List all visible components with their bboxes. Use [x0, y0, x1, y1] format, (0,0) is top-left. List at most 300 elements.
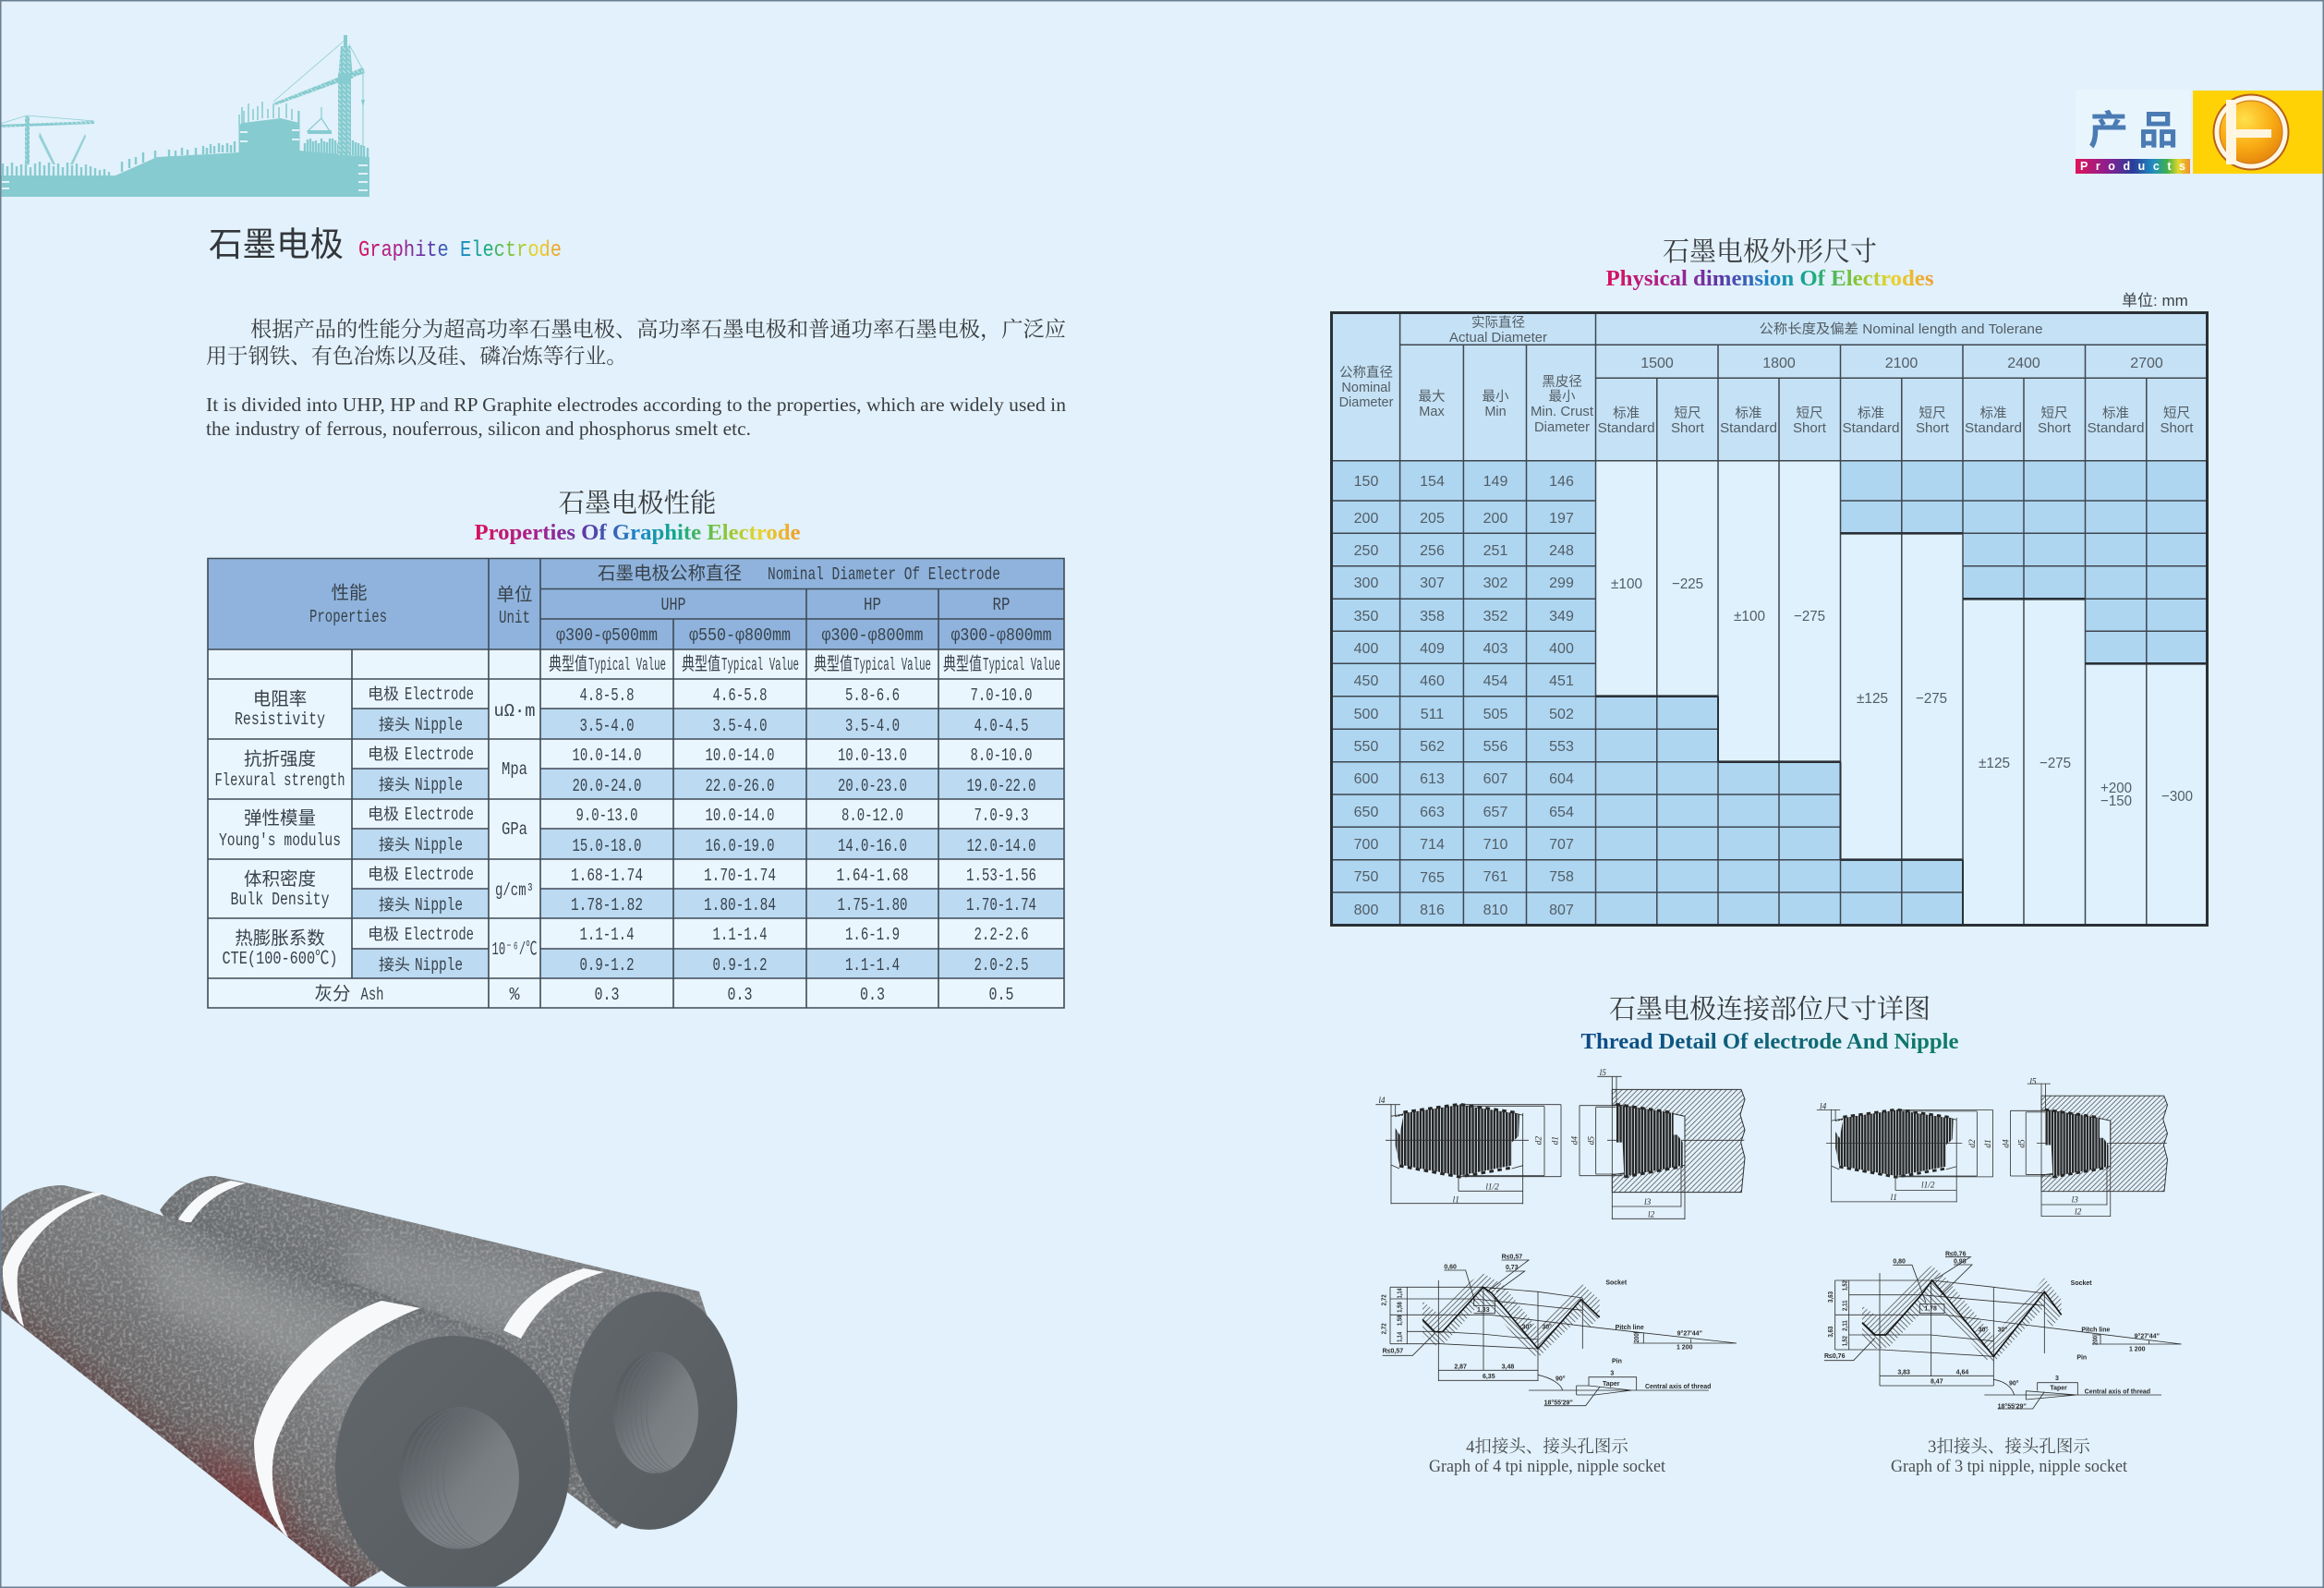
diagram: 3 tpi thread profile: 30° [1998, 1327, 2007, 1334]
diagram: 3 tpi thread profile: Pitch line [2081, 1327, 2110, 1334]
diagram: 3 tpi thread profile: 1,52 [1843, 1280, 1849, 1291]
diagram: 3 tpi thread profile: Taper [2050, 1385, 2067, 1391]
diameter rows: 550 [1354, 739, 1378, 755]
values: resistivity, strength, modulus, density, CTE, ash: 1.1-1.4 [580, 925, 634, 945]
diagram: 3 tpi nipple and socket outline: d5 [2017, 1139, 2027, 1148]
intro text: 用于钢铁、有色冶炼以及硅、磷冶炼等行业。 [206, 345, 627, 368]
diagram: 3 tpi thread profile: 1 200 [2129, 1347, 2146, 1353]
values: resistivity, strength, modulus, density, CTE, ash: 14.0-16.0 [838, 836, 907, 856]
column headers: RP [992, 595, 1011, 615]
diagram: 4 tpi thread profile: Taper [1603, 1381, 1620, 1388]
diameter rows: 250 [1354, 543, 1378, 559]
diagram: 3 tpi thread profile: 3 [2055, 1376, 2059, 1382]
property names: Young's modulus [219, 830, 341, 851]
typical value row: 典型值 [682, 654, 720, 674]
diameter rows: 765 [1420, 870, 1445, 886]
column headers: Nominal Diameter Of Electrode [768, 564, 1000, 585]
caption: 4 tpi graph: 4扣接头、接头孔图示 [1466, 1437, 1628, 1457]
diagram: 4 tpi nipple and socket outline: l3 [1644, 1198, 1652, 1207]
property names: 弹性模量 [244, 808, 316, 829]
diagram: 4 tpi thread profile: 1 200 [1676, 1345, 1693, 1352]
diagram: 4 tpi thread profile: R≤0,57 [1502, 1255, 1522, 1261]
table: graphite electrode properties [208, 558, 1064, 1008]
diagram: 4 tpi thread profile: 2,72 [1382, 1323, 1388, 1334]
header labels: 最大 [1419, 389, 1445, 405]
diameter rows: 400 [1354, 641, 1378, 657]
header labels: 标准 [1980, 406, 2006, 421]
values: resistivity, strength, modulus, density, CTE, ash: 7.0-10.0 [970, 685, 1033, 706]
diagram: 3 tpi thread profile: 9°27′44″ [2135, 1332, 2161, 1339]
heading: thread detail: 石墨电极连接部位尺寸详图 [1609, 994, 1931, 1024]
diameter rows: 714 [1420, 837, 1445, 853]
property names: Flexural strength [214, 770, 345, 791]
diagram: 4 tpi nipple and socket outline: l1 [1453, 1195, 1459, 1205]
electrode and nipple labels: 接头 [379, 896, 410, 914]
diameter rows: 349 [1549, 609, 1574, 624]
diameter rows: 460 [1420, 673, 1445, 689]
header labels: Short [1793, 421, 1826, 436]
diagram: 3 tpi nipple and socket outline: l5 [2029, 1077, 2037, 1086]
diagram: 4 tpi thread profile: R≤0,57 [1383, 1349, 1403, 1355]
tolerance values: ±125 [1979, 756, 2010, 771]
diagram: 3 tpi nipple and socket outline: d2 [1968, 1139, 1978, 1148]
diameter rows: 511 [1421, 707, 1444, 722]
diagram: 4 tpi thread profile: 90° [1555, 1376, 1566, 1383]
column headers: 性能 [331, 583, 368, 603]
header labels: 2100 [1885, 356, 1918, 371]
diagram: 3 tpi nipple and socket outline: l1 [1891, 1194, 1897, 1203]
column headers: 石墨电极公称直径 [598, 564, 742, 584]
table: physical dimensions of electrodes [1331, 312, 2208, 926]
diagram: 4 tpi thread profile: 6,35 [1483, 1374, 1495, 1380]
values: resistivity, strength, modulus, density, CTE, ash: 5.8-6.6 [845, 685, 900, 706]
diagram: 3 tpi thread profile: 18°55′29″ [1998, 1402, 2027, 1410]
units column: uΩ·m [493, 701, 536, 721]
values: resistivity, strength, modulus, density, CTE, ash: 12.0-14.0 [966, 836, 1036, 856]
diameter rows: 700 [1354, 837, 1378, 853]
header labels: 2400 [2007, 356, 2040, 371]
diameter rows: 654 [1549, 805, 1574, 820]
diagram: 4 tpi thread profile: 1,33 [1477, 1307, 1490, 1314]
values: resistivity, strength, modulus, density, CTE, ash: 3.5-4.0 [580, 716, 634, 736]
diameter rows: 200 [1483, 511, 1507, 527]
tolerance values: ±100 [1734, 609, 1765, 624]
tolerance values [1611, 576, 2193, 809]
diameter rows: 256 [1420, 543, 1445, 559]
diagram: 4 tpi nipple and socket outline: l1/2 [1485, 1182, 1499, 1192]
values: resistivity, strength, modulus, density, CTE, ash: 9.0-13.0 [576, 806, 637, 826]
tolerance values: ±100 [1611, 576, 1642, 592]
units column: 10⁻⁶/℃ [491, 939, 538, 960]
diagram: 3 tpi thread profile: 90° [2009, 1379, 2019, 1387]
header labels [1339, 315, 2193, 436]
diagram: 4 tpi nipple and socket outline: d1 [1552, 1136, 1561, 1145]
values: resistivity, strength, modulus, density, CTE, ash: 10.0-13.0 [838, 746, 907, 766]
header labels: 短尺 [2163, 406, 2190, 421]
diameter rows: 300 [1354, 576, 1378, 591]
typical value row [549, 654, 1060, 675]
electrode and nipple labels: 电极 [368, 746, 399, 763]
logo subtitle: Products [2080, 160, 2185, 173]
diameter rows: 403 [1483, 641, 1507, 657]
values: resistivity, strength, modulus, density, CTE, ash: 2.0-2.5 [974, 955, 1029, 976]
values: resistivity, strength, modulus, density, CTE, ash: 0.3 [860, 985, 885, 1005]
column headers [309, 564, 1051, 646]
values: resistivity, strength, modulus, density, CTE, ash: 16.0-19.0 [706, 836, 774, 856]
electrode and nipple labels: 接头 [379, 716, 410, 733]
electrode and nipple labels: 电极 [368, 926, 399, 943]
electrode and nipple labels: 接头 [379, 956, 410, 974]
diameter rows: 613 [1420, 771, 1445, 787]
header labels: Diameter [1534, 420, 1590, 435]
header labels: Min [1484, 405, 1507, 419]
diagram: 4 tpi nipple and socket outline: l5 [1600, 1069, 1606, 1078]
values: resistivity, strength, modulus, density, CTE, ash: 3.5-4.0 [713, 716, 767, 736]
diagram: 3 tpi thread profile: 200 [2093, 1336, 2100, 1345]
units column: % [510, 985, 520, 1005]
tolerance values: +200 [2100, 781, 2132, 796]
column headers: Properties [309, 607, 387, 627]
diameter rows: 307 [1420, 576, 1445, 591]
values: resistivity, strength, modulus, density, CTE, ash: 1.1-1.4 [845, 955, 900, 976]
header labels: Nominal [1341, 381, 1391, 395]
diameter rows: 400 [1549, 641, 1574, 657]
values: resistivity, strength, modulus, density, CTE, ash [314, 685, 1036, 1005]
header labels: 短尺 [1674, 406, 1701, 421]
diagram: 3 tpi thread profile: 1,52 [1843, 1336, 1849, 1346]
values: resistivity, strength, modulus, density, CTE, ash: 1.64-1.68 [837, 866, 909, 886]
diagram: 4 tpi thread profile: 2,72 [1382, 1294, 1388, 1305]
values: resistivity, strength, modulus, density, CTE, ash: 3.5-4.0 [845, 716, 900, 736]
diagram: 4 tpi thread profile: 18°55′29″ [1544, 1400, 1573, 1407]
electrode and nipple labels: 电极 [368, 806, 399, 823]
values: resistivity, strength, modulus, density, CTE, ash: 1.78-1.82 [571, 895, 643, 915]
heading: thread detail [1581, 994, 1959, 1054]
electrode and nipple labels: Electrode [405, 925, 474, 945]
header labels: 公称直径 [1339, 365, 1393, 381]
header labels: Standard [2088, 421, 2145, 436]
values: resistivity, strength, modulus, density, CTE, ash: 1.70-1.74 [966, 895, 1036, 915]
diagram: 4 tpi thread profile: 1,58 [1397, 1302, 1403, 1313]
typical value row: Typical Value [721, 655, 799, 675]
diameter rows: 502 [1549, 707, 1574, 722]
diameter rows: 600 [1354, 771, 1378, 787]
diagram: 3 tpi nipple and socket outline [1817, 1077, 2168, 1218]
diagram: 4 tpi thread profile: Pitch line [1616, 1325, 1644, 1331]
values: resistivity, strength, modulus, density, CTE, ash: 0.3 [728, 985, 752, 1005]
values: resistivity, strength, modulus, density, CTE, ash: 20.0-23.0 [838, 776, 907, 796]
title: 石墨电极 [209, 225, 344, 263]
diagram: 4 tpi thread profile: Pin [1612, 1358, 1622, 1364]
diagram: 4 tpi thread profile [1382, 1255, 1737, 1407]
icon: small tower crane [0, 115, 94, 164]
diagram: 3 tpi thread profile: 3,63 [1828, 1327, 1834, 1338]
diagram: 3 tpi thread profile: 4,64 [1956, 1369, 1968, 1376]
header labels: 1500 [1640, 356, 1674, 371]
diameter rows: 505 [1483, 707, 1507, 722]
typical value row: Typical Value [588, 655, 666, 675]
intro text: the industry of ferrous, nouferrous, silicon and phosphorus smelt etc. [206, 418, 751, 440]
diagram: 4 tpi thread profile: 30° [1522, 1324, 1531, 1331]
diagram: 3 tpi nipple and socket outline: d1 [1984, 1139, 1993, 1148]
title [209, 225, 562, 263]
units column: Mpa [502, 759, 527, 780]
column headers: Unit [499, 608, 530, 628]
diameter rows: 350 [1354, 609, 1378, 624]
column headers: HP [864, 595, 881, 615]
heading: physical dimension: 石墨电极外形尺寸 [1663, 236, 1877, 267]
values: resistivity, strength, modulus, density, CTE, ash: Ash [360, 985, 384, 1005]
diagram: 3 tpi thread profile [1824, 1251, 2182, 1410]
intro text: It is divided into UHP, HP and RP Graphite electrodes according to the properties, which are widely used in [206, 394, 1067, 416]
diagram: 3 tpi nipple and socket outline: l3 [2072, 1195, 2078, 1205]
caption: 3 tpi graph: Graph of 3 tpi nipple, nipple socket [1891, 1457, 2128, 1476]
electrode and nipple labels: Electrode [405, 685, 474, 705]
values: resistivity, strength, modulus, density, CTE, ash: 0.3 [595, 985, 619, 1005]
diagram: 3 tpi thread profile: 0,80 [1893, 1258, 1906, 1265]
shaded and open cells [1331, 461, 2207, 925]
diagram: 3 tpi thread profile: 2,11 [1843, 1320, 1849, 1331]
values: resistivity, strength, modulus, density, CTE, ash: 0.5 [988, 985, 1014, 1005]
diameter rows: 604 [1549, 771, 1574, 787]
diameter rows: 553 [1549, 739, 1574, 755]
diagram: 3 tpi thread profile: 3,83 [1897, 1369, 1910, 1376]
typical value row: Typical Value [853, 655, 931, 675]
diagram: 3 tpi thread profile: 3,63 [1828, 1291, 1834, 1303]
diameter rows: 200 [1354, 511, 1378, 527]
caption: 3 tpi graph: 3扣接头、接头孔图示 [1928, 1437, 2090, 1457]
icon: tall tower crane [272, 35, 365, 155]
header labels: Max [1419, 405, 1445, 419]
diagram: 4 tpi thread profile: 1,14 [1397, 1288, 1403, 1298]
caption: 4 tpi graph: Graph of 4 tpi nipple, nipple socket [1429, 1457, 1666, 1476]
diagram: 3 tpi thread profile: Pin [2076, 1355, 2087, 1362]
values: resistivity, strength, modulus, density, CTE, ash: 1.53-1.56 [966, 866, 1036, 886]
electrode and nipple labels: Electrode [405, 745, 474, 765]
column headers: φ300-φ800mm [951, 625, 1051, 646]
header labels: 短尺 [1919, 406, 1945, 421]
column headers: φ300-φ800mm [822, 625, 924, 646]
diagram: 4 tpi thread profile: 1,14 [1397, 1332, 1403, 1342]
diagram: 4 tpi nipple and socket outline: d5 [1587, 1136, 1596, 1145]
diagram: 3 tpi thread profile: Socket [2071, 1280, 2092, 1287]
header labels: Short [1916, 421, 1949, 436]
header labels: 公称长度及偏差 Nominal length and Tolerane [1759, 321, 2043, 337]
diagram: 4 tpi thread profile: 3 [1610, 1371, 1614, 1377]
values: resistivity, strength, modulus, density, CTE, ash: 7.0-9.3 [974, 806, 1029, 826]
diagram: 3 tpi nipple and socket outline: d4 [2003, 1139, 2012, 1148]
values: resistivity, strength, modulus, density, CTE, ash: 22.0-26.0 [706, 776, 774, 796]
heading: physical dimension: Physical dimension Of Electrodes [1605, 267, 1934, 291]
tolerance values: −275 [1794, 609, 1825, 624]
diagram: 4 tpi nipple and socket outline: l2 [1648, 1210, 1655, 1219]
values: resistivity, strength, modulus, density, CTE, ash: 4.8-5.8 [580, 685, 634, 706]
front end face with threaded socket [329, 1330, 576, 1588]
property names: 电阻率 [253, 689, 307, 709]
values: resistivity, strength, modulus, density, CTE, ash: 1.75-1.80 [837, 895, 907, 915]
header labels: Actual Diameter [1449, 331, 1547, 345]
column headers: φ550-φ800mm [689, 625, 791, 646]
diameter rows: 358 [1420, 609, 1445, 624]
diameter rows: 454 [1483, 673, 1507, 689]
property names: 抗折强度 [244, 749, 316, 770]
diagram: 4 tpi thread profile: Socket [1605, 1279, 1628, 1286]
electrode and nipple labels [368, 685, 474, 976]
property names: Bulk Density [231, 890, 330, 910]
unit note: 单位: mm [2122, 292, 2188, 309]
units column: g/cm³ [495, 880, 534, 901]
diameter rows: 302 [1483, 576, 1507, 591]
diameter rows: 707 [1549, 837, 1574, 853]
values: resistivity, strength, modulus, density, CTE, ash: 0.9-1.2 [580, 955, 634, 976]
caption: 3 tpi graph [1891, 1437, 2128, 1476]
header labels: Short [1671, 421, 1704, 436]
diagram: 4 tpi nipple and socket outline: d4 [1570, 1136, 1580, 1145]
values: resistivity, strength, modulus, density, CTE, ash: 10.0-14.0 [573, 746, 641, 766]
values: resistivity, strength, modulus, density, CTE, ash: 8.0-12.0 [841, 806, 903, 826]
diameter rows: 251 [1483, 543, 1507, 559]
values: resistivity, strength, modulus, density, CTE, ash: 1.68-1.74 [571, 866, 643, 886]
diameter rows: 807 [1549, 903, 1574, 918]
header labels: Standard [1965, 421, 2022, 436]
units column [491, 701, 538, 1005]
diagram: 4 tpi thread profile: 30° [1542, 1324, 1552, 1331]
electrode and nipple labels: 电极 [368, 685, 399, 703]
typical value row: 典型值 [814, 654, 853, 674]
diagram: 4 tpi nipple and socket outline: d2 [1535, 1136, 1544, 1145]
header labels: Standard [1598, 421, 1655, 436]
values: resistivity, strength, modulus, density, CTE, ash: 1.70-1.74 [704, 866, 776, 886]
header labels: 标准 [1858, 406, 1884, 421]
property names [214, 689, 345, 969]
electrode and nipple labels: 接头 [379, 776, 410, 794]
heading: thread detail: Thread Detail Of electrode And Nipple [1581, 1030, 1959, 1054]
diameter rows: 607 [1483, 771, 1507, 787]
electrode and nipple labels: Electrode [405, 865, 474, 885]
header labels: Diameter [1339, 395, 1394, 410]
header labels: 黑皮径 [1542, 374, 1582, 390]
electrode and nipple labels: 电极 [368, 866, 399, 883]
values: resistivity, strength, modulus, density, CTE, ash: 20.0-24.0 [573, 776, 641, 796]
electrode and nipple labels: Nipple [415, 715, 463, 735]
illustration: construction skyline with cranes [0, 35, 369, 197]
diameter rows: 562 [1420, 739, 1445, 755]
diagram: 3 tpi nipple and socket outline: l4 [1820, 1103, 1827, 1112]
values: resistivity, strength, modulus, density, CTE, ash: 8.0-10.0 [970, 746, 1033, 766]
diagram: 4 tpi thread profile: 0,60 [1444, 1264, 1457, 1270]
diagram: 3 tpi nipple and socket outline: l2 [2075, 1208, 2082, 1218]
tolerance values: −275 [2040, 756, 2071, 771]
header labels: 1800 [1762, 356, 1796, 371]
header labels: 标准 [1613, 406, 1640, 421]
values: resistivity, strength, modulus, density, CTE, ash: 19.0-22.0 [966, 776, 1036, 796]
logo title 产品: 产品 [2088, 109, 2188, 153]
column headers: UHP [661, 595, 685, 615]
header labels: Min. Crust [1531, 405, 1593, 419]
property names: 热膨胀系数 [235, 928, 325, 949]
diagram: 4 tpi thread profile: 3,48 [1502, 1364, 1514, 1370]
diameter rows: 663 [1420, 805, 1445, 820]
header labels: 标准 [1735, 406, 1762, 421]
diagram: 3 tpi thread profile: 1,78 [1924, 1306, 1937, 1313]
property names: 体积密度 [244, 869, 316, 890]
values: resistivity, strength, modulus, density, CTE, ash: 灰分 [314, 984, 351, 1004]
header labels: 短尺 [1796, 406, 1823, 421]
values: resistivity, strength, modulus, density, CTE, ash: 1.1-1.4 [713, 925, 767, 945]
diagram: 4 tpi thread profile: 2,87 [1454, 1364, 1467, 1370]
diameter rows: 205 [1420, 511, 1445, 527]
heading: physical dimension [1605, 236, 1934, 291]
header labels: Standard [1720, 421, 1777, 436]
caption: 4 tpi graph [1429, 1437, 1666, 1476]
diagram: 3 tpi thread profile: 8,47 [1931, 1378, 1943, 1385]
diameter rows: 154 [1420, 474, 1445, 490]
diagram: 3 tpi thread profile: 30° [1979, 1327, 1988, 1334]
diagram: 4 tpi nipple and socket outline [1375, 1069, 1745, 1219]
diameter rows: 299 [1549, 576, 1574, 591]
values: resistivity, strength, modulus, density, CTE, ash: 1.6-1.9 [845, 925, 900, 945]
header labels: 最小 [1548, 389, 1576, 405]
tolerance values: −225 [1672, 576, 1703, 592]
column headers: 单位 [496, 585, 533, 605]
header labels: 实际直径 [1471, 315, 1525, 331]
front electrode [0, 1185, 576, 1588]
tolerance values: −300 [2161, 789, 2193, 805]
header labels: Standard [1842, 421, 1899, 436]
diameter rows: 816 [1420, 903, 1445, 918]
diameter rows: 750 [1354, 869, 1378, 885]
diameter rows: 556 [1483, 739, 1507, 755]
header labels: 标准 [2102, 406, 2129, 421]
diameter rows: 352 [1483, 609, 1507, 624]
diagram: 4 tpi nipple and socket outline: l4 [1378, 1097, 1386, 1106]
values: resistivity, strength, modulus, density, CTE, ash: 2.2-2.6 [974, 925, 1029, 945]
header labels: Short [2038, 421, 2071, 436]
diameter rows [1354, 474, 1574, 918]
units column: GPa [502, 819, 527, 840]
values: resistivity, strength, modulus, density, CTE, ash: 4.6-5.8 [713, 685, 767, 706]
diagram: 3 tpi thread profile: R≤0,76 [1945, 1251, 1967, 1257]
diagram: 4 tpi thread profile: 0,73 [1506, 1265, 1519, 1271]
diameter rows: 761 [1483, 869, 1507, 885]
diameter rows: 149 [1483, 474, 1507, 490]
diameter rows: 500 [1354, 707, 1378, 722]
property names: Resistivity [235, 709, 325, 730]
electrode and nipple labels: Nipple [415, 895, 463, 915]
diameter rows: 146 [1549, 474, 1574, 490]
diagram: 3 tpi thread profile: 0,98 [1954, 1258, 1967, 1265]
electrode and nipple labels: Nipple [415, 835, 463, 855]
values: resistivity, strength, modulus, density, CTE, ash: 10.0-14.0 [706, 806, 774, 826]
values: resistivity, strength, modulus, density, CTE, ash: 15.0-18.0 [573, 836, 641, 856]
tolerance values: −150 [2100, 794, 2132, 809]
diagram: 4 tpi thread profile: Central axis of thread [1645, 1384, 1711, 1390]
header labels: 最小 [1482, 389, 1509, 405]
diagram: 4 tpi thread profile: 9°27′44″ [1677, 1330, 1703, 1338]
intro text: 根据产品的性能分为超高功率石墨电极、高功率石墨电极和普通功率石墨电极，广泛应 [250, 318, 1066, 342]
typical value row: 典型值 [943, 654, 982, 674]
diameter rows: 710 [1483, 837, 1507, 853]
heading: properties table: 石墨电极性能 [558, 488, 717, 518]
values: resistivity, strength, modulus, density, CTE, ash: 0.9-1.2 [713, 955, 767, 976]
diameter rows: 409 [1420, 641, 1445, 657]
values: resistivity, strength, modulus, density, CTE, ash: 1.80-1.84 [704, 895, 776, 915]
diameter rows: 758 [1549, 869, 1574, 885]
diameter rows: 248 [1549, 543, 1574, 559]
diameter rows: 800 [1354, 903, 1378, 918]
electrode and nipple labels: Nipple [415, 955, 463, 976]
rear electrode [160, 1176, 745, 1535]
